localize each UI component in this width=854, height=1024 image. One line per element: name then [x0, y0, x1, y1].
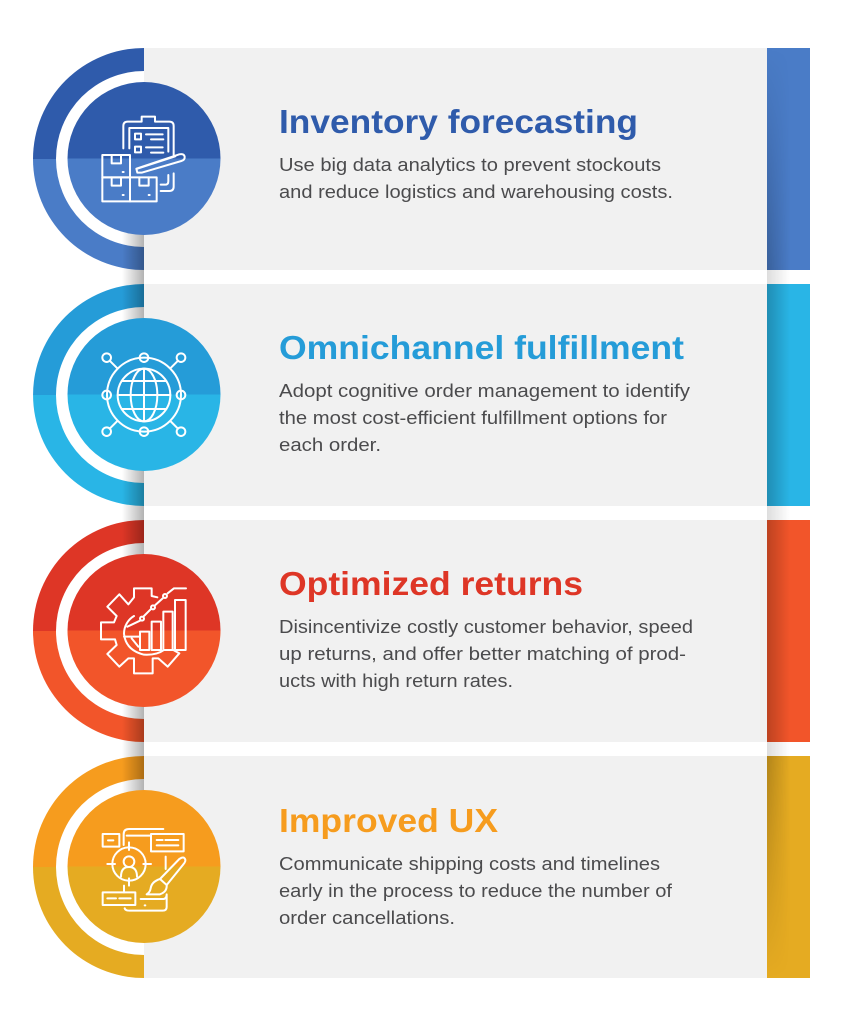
body text: Adopt cognitive order management to identify — [279, 381, 690, 401]
body text — [279, 381, 690, 455]
icon: user target and paint brush — [103, 829, 185, 911]
body text: Disincentivize costly customer behavior, speed — [279, 617, 693, 637]
panel: optimized returns — [33, 520, 810, 742]
disc — [68, 554, 220, 707]
text: inventory forecasting — [279, 103, 673, 202]
body text: up returns, and offer better matching of prod- — [279, 644, 686, 664]
body text — [279, 617, 693, 691]
white ring gap — [56, 779, 144, 955]
text: improved UX — [279, 802, 673, 928]
content card — [144, 284, 767, 506]
body text — [279, 155, 673, 202]
body text: early in the process to reduce the number of — [279, 881, 673, 901]
disc — [68, 790, 220, 943]
icon: connected globe — [102, 353, 185, 436]
side colour bar — [767, 520, 810, 742]
text: omnichannel fulfillment — [279, 329, 690, 455]
body text: Communicate shipping costs and timelines — [279, 854, 660, 874]
icon: gear with bar chart — [101, 588, 186, 673]
outer ring — [33, 284, 144, 506]
outer ring — [33, 756, 144, 978]
body text — [279, 854, 673, 928]
icon: clipboard, boxes and pen — [102, 117, 185, 201]
heading: Optimized returns — [279, 565, 583, 602]
content card — [144, 756, 767, 978]
text: optimized returns — [279, 565, 693, 691]
white ring gap — [56, 543, 144, 719]
content card — [144, 520, 767, 742]
body text: ucts with high return rates. — [279, 671, 513, 691]
heading: Improved UX — [279, 802, 498, 839]
panel: inventory forecasting — [33, 48, 810, 270]
body text: and reduce logistics and warehousing costs. — [279, 182, 673, 202]
panel: omnichannel fulfillment — [33, 284, 810, 506]
side colour bar — [767, 284, 810, 506]
content card — [144, 48, 767, 270]
heading: Inventory forecasting — [279, 103, 638, 140]
disc — [68, 318, 220, 471]
body text: order cancellations. — [279, 908, 455, 928]
icon disc: omnichannel — [68, 318, 220, 471]
body text: the most cost-efficient fulfillment options for — [279, 408, 667, 428]
outer ring — [33, 48, 144, 270]
icon disc: returns — [68, 554, 220, 707]
body text: each order. — [279, 435, 381, 455]
icon disc: inventory — [68, 82, 220, 235]
icon disc: UX — [68, 790, 220, 943]
heading: Omnichannel fulfillment — [279, 329, 684, 366]
side colour bar — [767, 48, 810, 270]
white ring gap — [56, 307, 144, 483]
disc — [68, 82, 220, 235]
body text: Use big data analytics to prevent stockouts — [279, 155, 661, 175]
panel: improved UX — [33, 756, 810, 978]
side colour bar — [767, 756, 810, 978]
white ring gap — [56, 71, 144, 247]
outer ring — [33, 520, 144, 742]
junction shadows — [122, 48, 790, 978]
